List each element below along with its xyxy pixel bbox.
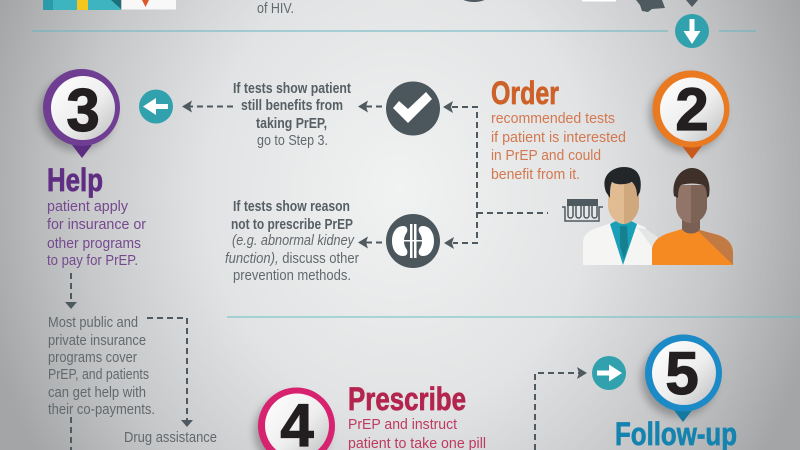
text: benefits branch: If tests show patient: [233, 80, 351, 97]
pin: step 4: [254, 388, 335, 450]
text: order description: in PrEP and could: [491, 147, 601, 164]
arrow: branching test result connector: [443, 101, 548, 249]
icon: cropped people from step 1: [43, 0, 176, 10]
text: reason not to prescribe branch: not to prescribe PrEP: [231, 216, 353, 233]
icon: right arrow circle: [592, 356, 626, 390]
text: insurance coverage: [48, 314, 155, 418]
text: insurance coverage: can get help with: [48, 384, 146, 401]
heading: Order: Order: [491, 75, 559, 111]
arrow: to step 5: [535, 367, 587, 450]
pin: step 5: 5: [665, 340, 699, 407]
arrow: coverage to drug assistance: [147, 318, 193, 427]
text: order description: recommended tests: [491, 110, 615, 127]
pin: step 3: [39, 69, 120, 158]
text: reason not to prescribe branch: function), discuss other: [225, 250, 359, 267]
text: drug assistance: Drug assistance: [124, 429, 217, 446]
text: order description: if patient is interested: [491, 129, 626, 146]
text: insurance coverage: programs cover: [48, 349, 137, 366]
icon: test tubes: [562, 199, 603, 221]
text: reason not to prescribe branch: prevention methods.: [233, 267, 351, 284]
text: order description: benefit from it.: [491, 166, 580, 183]
text: benefits branch: still benefits from: [241, 97, 343, 114]
icon: doctor: [583, 167, 658, 265]
text: insurance coverage: PrEP, and patients: [48, 366, 149, 383]
pin: step 3: 3: [66, 77, 100, 144]
icon: down arrow circle: [675, 14, 709, 48]
heading: Help: Help: [47, 162, 103, 198]
arrow: help to insurance text: [65, 273, 77, 309]
text: insurance coverage: Most public and: [48, 314, 138, 331]
text: help description: other programs: [47, 235, 141, 252]
pin: step 2: [649, 70, 730, 159]
text: help description: [47, 198, 146, 269]
text: help description: for insurance or: [47, 216, 146, 233]
text: benefits branch: go to Step 3.: [257, 132, 328, 149]
pin: step 5: [641, 334, 722, 422]
heading: Prescribe: Prescribe: [348, 381, 466, 417]
text: insurance coverage: private insurance: [48, 332, 146, 349]
text: help description: to pay for PrEP.: [47, 252, 138, 269]
text: insurance coverage: their co-payments.: [48, 401, 155, 418]
icon: patient: [652, 168, 733, 265]
arrow: to step 3 circle: [182, 100, 233, 112]
text: order description: [491, 110, 626, 183]
pin: step 2: 2: [675, 76, 709, 143]
text: end of step 1 sentence: of HIV.: [257, 0, 294, 17]
icon: check mark circle: [386, 82, 440, 136]
text: prescribe description: [348, 416, 486, 450]
text: reason not to prescribe branch: [225, 198, 359, 284]
icon: kidney circle: [386, 214, 440, 268]
arrow: check to text: [358, 100, 382, 112]
arrow: coverage continuing down: [70, 417, 72, 450]
text: benefits branch: taking PrEP,: [256, 115, 327, 132]
text: help description: patient apply: [47, 198, 128, 215]
text: benefits branch: [233, 80, 351, 149]
icon: cropped dark shapes from step 1: [458, 0, 698, 12]
text: reason not to prescribe branch: (e.g. abnormal kidney: [232, 232, 355, 249]
icon: left arrow circle: [139, 90, 173, 124]
text: prescribe description: PrEP and instruct: [348, 416, 458, 433]
text: reason not to prescribe branch: If tests show reason: [233, 198, 350, 215]
arrow: kidney to text: [358, 236, 382, 248]
